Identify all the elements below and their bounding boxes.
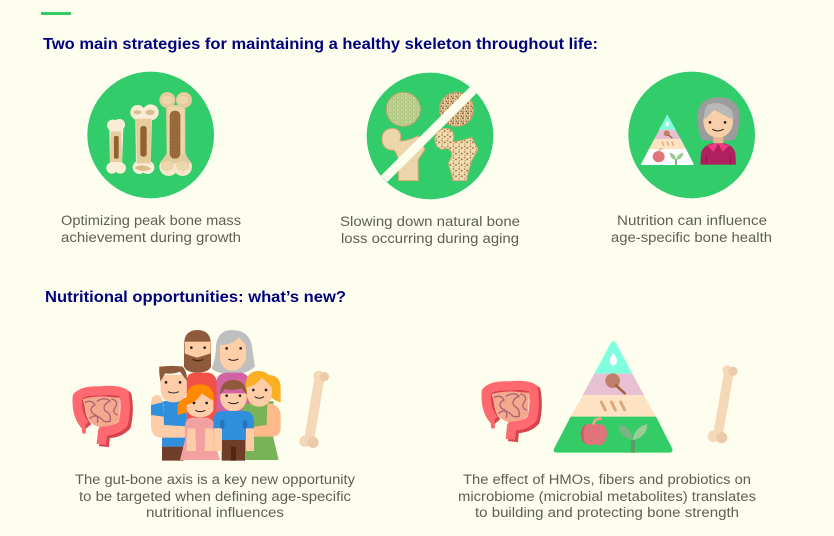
icon: bone xyxy=(299,371,329,448)
panel: HMOs, fibers and probiotics xyxy=(458,341,756,520)
caption: nutrition: Nutrition can influence xyxy=(617,213,767,228)
icon: three growing bones xyxy=(87,71,214,199)
caption: gut-bone axis: to be targeted when defining age-specific xyxy=(79,489,351,504)
caption: bone loss xyxy=(340,214,520,246)
icon: gut xyxy=(77,390,128,447)
heading: nutritional opportunities: Nutritional opportunities: what’s new? xyxy=(45,289,346,306)
caption: gut-bone axis: The gut-bone axis is a key new opportunity xyxy=(75,472,355,487)
caption: bone loss: Slowing down natural bone xyxy=(340,214,520,229)
accent line xyxy=(41,12,71,15)
caption: peak bone mass xyxy=(61,213,241,245)
icon: gut xyxy=(486,385,537,442)
panel: age-specific nutrition xyxy=(611,71,772,245)
panel: peak bone mass xyxy=(61,71,241,245)
icon: healthy and porous bone, crossed xyxy=(366,72,494,200)
panel: slowing bone loss xyxy=(340,72,520,246)
caption: HMOs: microbiome (microbial metabolites) translates xyxy=(458,489,756,504)
caption: HMOs: to building and protecting bone strength xyxy=(475,505,739,520)
icon: food pyramid xyxy=(554,341,673,453)
caption: nutrition: age-specific bone health xyxy=(611,230,772,245)
caption: gut-bone axis: nutritional influences xyxy=(146,505,284,520)
caption: peak bone mass: achievement during growth xyxy=(61,230,241,245)
caption: HMOs: The effect of HMOs, fibers and probiotics on xyxy=(463,472,751,487)
heading: strategies: Two main strategies for maintaining a healthy skeleton throughout life: xyxy=(43,36,598,53)
caption: gut-bone axis xyxy=(75,472,355,520)
caption: peak bone mass: Optimizing peak bone mass xyxy=(61,213,241,228)
caption: HMOs xyxy=(458,472,756,520)
panel: gut-bone axis xyxy=(75,330,355,520)
illustration: family xyxy=(151,330,281,461)
icon: bone xyxy=(708,365,738,443)
caption: bone loss: loss occurring during aging xyxy=(341,231,519,246)
caption: nutrition xyxy=(611,213,772,245)
icon: food pyramid and older woman xyxy=(628,71,755,199)
